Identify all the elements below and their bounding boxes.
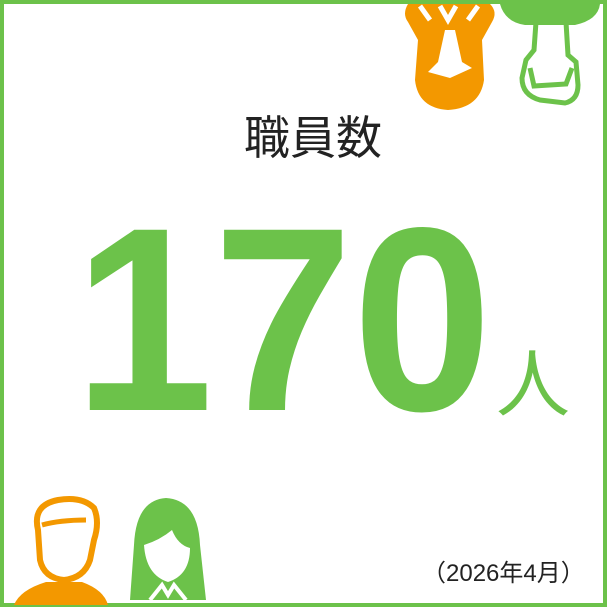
title: 職員数 — [244, 112, 382, 164]
date note: （2026年4月） — [422, 560, 585, 587]
unit: 人 — [496, 343, 570, 426]
icon: green person top — [500, 4, 600, 103]
icon: green woman bottom — [130, 498, 206, 600]
icon: orange person top — [405, 4, 495, 110]
big number: 170 — [74, 173, 492, 466]
icon: orange man bottom — [14, 499, 108, 605]
